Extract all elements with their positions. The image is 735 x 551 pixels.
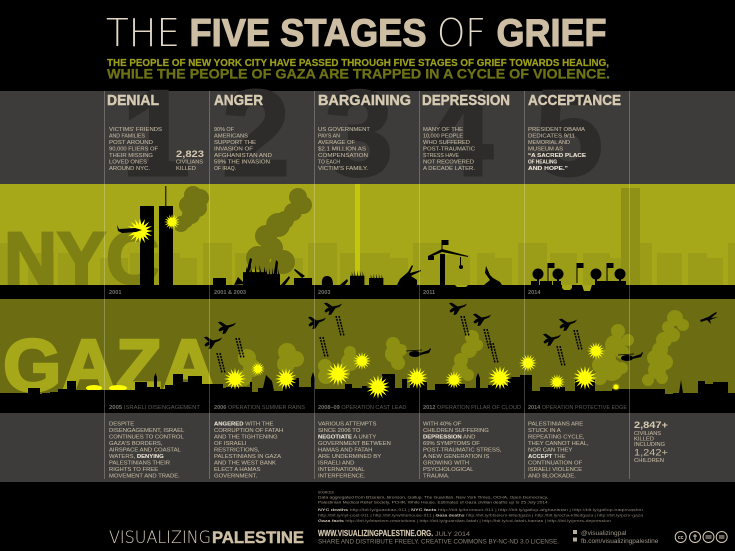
social handles	[573, 530, 659, 545]
stage: denial: VICTIMS' FRIENDS	[109, 127, 162, 133]
title	[106, 11, 606, 56]
stage: denial: DENIAL	[107, 93, 159, 109]
text: acceptance in Gaza: AND BLOCKADE.	[528, 474, 576, 480]
stage: denial: AND FAMILIES	[109, 134, 145, 140]
panel: NYC band	[0, 184, 735, 300]
stage: depression: STRESS HAVE	[423, 153, 459, 159]
text: bargaining in Gaza: GOVERNMENT BETWEEN	[318, 441, 391, 447]
logo: Visualizing Palestine: PALESTINE	[212, 528, 304, 547]
text: bargaining in Gaza: VARIOUS ATTEMPTS	[318, 422, 376, 428]
stage: anger: AMERICANS	[214, 134, 248, 140]
explosions at towers	[127, 214, 180, 244]
text: depression in Gaza: GROWING WITH	[423, 460, 469, 466]
sources: http://bit.ly/nyt-post-911 | http://bit.ly/whitehouse-911 | Gaza deaths http://bit.ly/btselem-killedgaza | http://bit.ly/ocha-killedgaza | http://bit.ly/pchr-gaza	[318, 514, 643, 518]
NYC date labels: 2003	[318, 290, 330, 296]
text: denial in Gaza: CONTINUES TO CONTROL	[109, 434, 184, 440]
text: anger in Gaza: GOVERNMENT.	[214, 474, 258, 480]
smoke plumes	[236, 310, 689, 386]
stage: bargaining	[318, 93, 411, 172]
text: acceptance in Gaza: REPEATING CYCLE,	[528, 434, 585, 440]
stage: anger: 90% OF	[214, 127, 234, 133]
title: THE	[106, 11, 180, 56]
text: denial in Gaza: WATERS, DENYING	[109, 454, 164, 460]
memorial trees and flags	[531, 263, 626, 285]
fighter jets	[203, 300, 579, 350]
sources: Data aggregated from B'tselem, Bronson, Gallup, The Guardian, New York Times, OCHA, Open Democracy,	[318, 496, 548, 500]
stage: bargaining: PAYS AN	[318, 134, 340, 140]
helicopters	[406, 348, 643, 361]
big stage numbers: 5	[535, 65, 603, 201]
NYC ground	[0, 285, 735, 299]
Gaza event captions: 2008–09 OPERATION CAST LEAD	[318, 405, 406, 411]
stage: anger: 59% THE INVASION	[214, 160, 270, 166]
creative commons icons	[675, 532, 727, 542]
stage: depression: A DECADE LATER.	[423, 166, 475, 172]
website and license	[318, 529, 559, 546]
stage: depression: NOT RECOVERED	[423, 160, 474, 166]
stage: anger: SUPPORT THE	[214, 140, 256, 146]
stage: depression: 10,000 PEOPLE	[423, 134, 463, 140]
sources: Palestinian Medical Relief Society, PCHR, White House. Estimates of Gaza civilian deaths up to 25 July 2014.	[318, 500, 549, 504]
stat: Gaza casualties	[634, 420, 669, 464]
text: acceptance in Gaza: THEY CANNOT HEAL,	[528, 441, 589, 447]
text: denial in Gaza: GAZA'S BORDERS,	[109, 441, 163, 447]
Gaza skyline and ground	[0, 372, 735, 413]
text: denial in Gaza: MOVEMENT AND TRADE.	[109, 474, 180, 480]
text: anger in Gaza: AND THE TIGHTENING	[214, 434, 278, 440]
stat: civilians killed in NYC: 2,823	[176, 149, 204, 160]
stage: denial: POST AROUND	[109, 140, 153, 146]
text: acceptance in Gaza: STUCK IN A	[528, 428, 561, 434]
stat: Gaza casualties: CIVILIANS	[634, 431, 661, 437]
sources: NYC deaths http://bit.ly/guardian-911 | NYC facts http://bit.ly/bronson-911 | http://bit.ly/gallup-afghanistan | http://bit.ly/gallup-iraqinvasion	[318, 508, 643, 512]
text: depression in Gaza: PSYCHOLOGICAL	[423, 467, 474, 473]
big stage numbers: 3	[325, 65, 393, 201]
text: acceptance in Gaza: CONTINUATION OF	[528, 460, 583, 466]
text: depression in Gaza: 69% SYMPTOMS OF	[423, 441, 480, 447]
plane	[117, 225, 142, 233]
text: bargaining in Gaza	[318, 422, 391, 480]
stage: denial	[107, 93, 162, 172]
text: denial in Gaza	[109, 422, 185, 480]
website and license: WWW.VISUALIZINGPALESTINE.ORG.	[318, 529, 433, 538]
big stage numbers: 1	[122, 65, 190, 201]
social handles: fb.com/visualizingpalestine	[581, 538, 659, 545]
text: anger in Gaza: ANGERED WITH THE	[214, 422, 274, 428]
background skyline	[0, 188, 735, 285]
NYC date labels: 2011	[423, 290, 435, 296]
stage: denial: 90,000 FLIERS OF	[109, 146, 158, 152]
text: bargaining in Gaza: SINCE 2006 TO	[318, 428, 361, 434]
website and license: SHARE AND DISTRIBUTE FREELY. CREATIVE COMMONS BY-NC-ND 3.0 LICENSE.	[318, 538, 559, 546]
text: acceptance in Gaza: ISRAELI VIOLENCE	[528, 467, 582, 473]
text: acceptance in Gaza: NOR CAN THEY	[528, 448, 572, 454]
big stage numbers: 4	[425, 65, 493, 201]
sources: SOURCES	[318, 490, 334, 494]
text: acceptance in Gaza	[528, 422, 589, 480]
stage: acceptance: ACCEPTANCE	[528, 93, 621, 109]
text: bargaining in Gaza: NEGOTIATE A UNITY	[318, 434, 376, 440]
Gaza event captions: 2005 ISRAELI DISENGAGEMENT	[109, 405, 201, 411]
column dividers	[104, 91, 630, 479]
stage: acceptance: OF HEALING	[528, 160, 557, 166]
smoke: towers	[173, 186, 209, 232]
text: denial in Gaza: DISENGAGEMENT, ISRAEL	[109, 428, 185, 434]
text: anger in Gaza: ELECT A HAMAS	[214, 467, 260, 473]
stage: anger	[214, 93, 272, 172]
logo: Visualizing Palestine: VISUALIZING	[109, 528, 211, 548]
subtitle	[107, 57, 610, 82]
GAZA lettering: GAZA	[3, 324, 216, 407]
text: bargaining in Gaza: ARE UNDERMINED BY	[318, 454, 381, 460]
text: depression in Gaza: A NEW GENERATION IS	[423, 454, 489, 460]
NYC lettering: NYC	[4, 217, 159, 300]
stage: acceptance: AND HOPE.”	[528, 166, 568, 172]
stage: acceptance: MEMORIAL AND	[528, 140, 570, 146]
ground notches	[455, 285, 592, 291]
stage: denial: AROUND NYC.	[109, 166, 150, 172]
stat: civilians killed in NYC: CIVILIANS	[176, 160, 203, 166]
creative commons icons: cc	[678, 535, 684, 541]
text: bargaining in Gaza: INTERNATIONAL	[318, 467, 365, 473]
title: FIVE STAGES	[190, 12, 426, 55]
big stage numbers: 2	[222, 65, 290, 201]
stage: acceptance	[528, 93, 621, 172]
text: denial in Gaza: RIGHTS TO FREE	[109, 467, 158, 473]
stage: acceptance: PRESIDENT OBAMA	[528, 127, 585, 133]
stat: Gaza casualties: CHILDREN	[634, 458, 664, 464]
text: bargaining in Gaza: HAMAS AND FATAH	[318, 448, 372, 454]
stage: denial: LOVED ONES	[109, 160, 147, 166]
text: depression in Gaza: CHILDREN SUFFERING	[423, 428, 489, 434]
panel: five stages of New York	[0, 65, 735, 201]
panel: Gaza text	[0, 413, 735, 482]
Gaza event captions	[109, 405, 627, 411]
subtitle: THE PEOPLE OF NEW YORK CITY HAVE PASSED THROUGH FIVE STAGES OF GRIEF TOWARDS HEALING,	[107, 57, 609, 69]
text: depression in Gaza	[423, 422, 502, 480]
stat: Gaza casualties: 1,242+	[634, 448, 669, 458]
panel: Gaza band	[0, 299, 735, 413]
big stage numbers	[122, 65, 603, 201]
text: anger in Gaza: AND THE WEST BANK	[214, 460, 276, 466]
Gaza event captions: 2006 OPERATION SUMMER RAINS	[214, 405, 305, 411]
stage: acceptance: “A SACRED PLACE	[528, 153, 586, 159]
text: bargaining in Gaza: ISRAELI AND	[318, 460, 354, 466]
sources	[318, 490, 643, 523]
stat: Gaza casualties: 2,847+	[634, 420, 669, 431]
stage: anger: OF IRAQ.	[214, 166, 236, 172]
website and license: JULY 2014	[435, 531, 470, 538]
text: depression in Gaza: POST-TRAUMATIC STRESS,	[423, 448, 502, 454]
stage: bargaining: BARGAINING	[318, 93, 411, 109]
stage: acceptance: MUSEUM AS	[528, 146, 563, 152]
rubble and recovery vehicles	[213, 258, 383, 286]
text: denial in Gaza: DESPITE	[109, 422, 134, 428]
Gaza event captions: 2014 OPERATION PROTECTIVE EDGE	[528, 405, 627, 411]
text: depression in Gaza: TRAUMA.	[423, 474, 450, 480]
stat: Gaza casualties: INCLUDING	[634, 442, 665, 448]
text: anger in Gaza: PALESTINIANS IN GAZA	[214, 454, 281, 460]
NYC date labels: 2001 & 2003	[214, 290, 246, 296]
text: anger in Gaza	[214, 422, 283, 480]
explosions over Gaza	[224, 342, 620, 399]
text: acceptance in Gaza: ACCEPT THE	[528, 454, 566, 460]
twin towers	[140, 186, 173, 285]
stage: bargaining: COMPENSATION	[318, 153, 368, 159]
stage: anger: ANGER	[214, 93, 263, 109]
stage: depression: MANY OF THE	[423, 127, 463, 133]
text: depression in Gaza: WITH 40% OF	[423, 422, 462, 428]
text: anger in Gaza: RESTRICTIONS,	[214, 448, 260, 454]
title: GRIEF	[496, 12, 606, 55]
stage: anger: AFGHANISTAN AND	[214, 153, 272, 159]
subtitle: WHILE THE PEOPLE OF GAZA ARE TRAPPED IN A CYCLE OF VIOLENCE.	[107, 66, 610, 82]
stage: acceptance: DEDICATES 9/11	[528, 134, 575, 140]
text: denial in Gaza: PALESTINIANS THEIR	[109, 460, 170, 466]
stage: bargaining: US GOVERNMENT	[318, 127, 370, 133]
stat: civilians killed in NYC: KILLED	[176, 166, 196, 172]
text: denial in Gaza: AIRSPACE AND COASTAL	[109, 448, 182, 454]
stage: depression: POST-TRAUMATIC	[423, 146, 476, 152]
NYC date labels	[109, 290, 541, 296]
stage: bargaining: TO EACH	[318, 160, 340, 166]
logo: Visualizing Palestine	[109, 528, 304, 548]
text: anger in Gaza: OF ISRAELI	[214, 441, 247, 447]
Gaza event captions: 2012 OPERATION PILLAR OF CLOUD	[423, 405, 521, 411]
text: acceptance in Gaza: PALESTINIANS ARE	[528, 422, 583, 428]
stage: depression: DEPRESSION	[422, 93, 510, 109]
stage: depression: WHO SUFFERED	[423, 140, 470, 146]
text: anger in Gaza: CORRUPTION OF FATAH	[214, 428, 283, 434]
NYC date labels: 2001	[109, 290, 121, 296]
stage: bargaining: AVERAGE OF	[318, 140, 355, 146]
stage: bargaining: $2.1 MILLION AS	[318, 146, 366, 152]
tribute in light beam	[355, 184, 360, 285]
stage: denial: THEIR MISSING	[109, 153, 153, 159]
excavators and crane	[397, 240, 502, 285]
stat: civilians killed in NYC	[176, 149, 204, 172]
falling bombs	[217, 316, 582, 373]
drone	[700, 312, 718, 324]
text: depression in Gaza: DEPRESSION AND	[423, 434, 475, 440]
social handles: @visualizingpal	[581, 530, 627, 537]
stage: bargaining: VICTIM'S FAMILY.	[318, 166, 368, 172]
stage: depression	[422, 93, 510, 172]
smoke: ground zero	[246, 188, 312, 282]
NYC date labels: 2014	[528, 290, 541, 296]
title: OF	[437, 11, 486, 56]
stage: anger: INVASION OF	[214, 146, 253, 152]
tanks	[86, 385, 127, 391]
text: bargaining in Gaza: INTERFERENCE.	[318, 474, 366, 480]
sources: Gaza facts http://bit.ly/btselem-restrictions | http://bit.ly/guardian-fatah | http://bit.ly/cd-fatah-hamas | http://bit.ly/pmrs-depression	[318, 519, 611, 523]
stat: Gaza casualties: KILLED	[634, 436, 654, 442]
